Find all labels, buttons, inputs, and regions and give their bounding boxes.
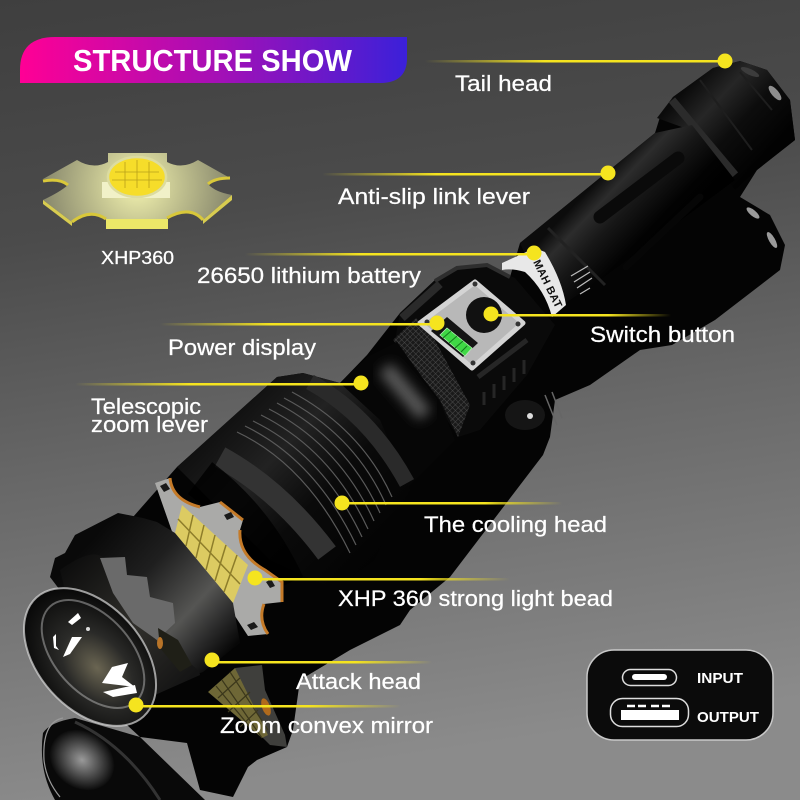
leader: attack head [204,652,432,668]
label: battery: 26650 lithium battery [197,263,421,288]
leader: switch [484,306,671,322]
switch panel [420,282,523,368]
XHP360 LED star [43,153,232,229]
leader: cooling head [334,496,562,510]
anti-slip link lever [520,125,735,312]
LED board [155,478,282,636]
battery ring [502,248,566,317]
switch section [395,265,555,437]
small reflected board [157,628,192,672]
chip [102,182,170,198]
label: attack head: Attack head [296,669,421,694]
leader: telescopic [75,376,368,390]
input port icon [622,670,676,686]
label: telescopic zoom lever: Telescopic [91,394,201,419]
reflection of lens [38,718,205,800]
grip slots [478,340,527,405]
reflection of LED board [208,665,287,747]
switch button [466,297,502,333]
label: anti-slip: Anti-slip link lever [338,184,530,209]
neck bars [571,266,592,294]
output label: OUTPUT [697,709,759,726]
leader: battery [245,246,542,260]
knurled ring [393,318,470,437]
label: power display: Power display [168,335,316,360]
battery ring: MAH BAT [530,258,564,310]
sleeve [340,342,455,490]
label: switch: Switch button [590,322,735,347]
zoom convex mirror [0,563,182,751]
attack head [50,513,240,695]
ports panel [587,650,773,740]
label: light bead: XHP 360 strong light bead [338,586,613,611]
label: telescopic zoom lever [91,394,208,437]
front ring [60,554,200,695]
leader: power display [160,316,444,330]
cooling ribs [237,392,392,553]
leader: zoom mirror [128,698,401,712]
cooling head [177,373,410,590]
title banner [20,37,407,83]
input label: INPUT [697,670,743,687]
label: telescopic zoom lever: zoom lever [91,412,208,437]
label: cooling head: The cooling head [424,512,607,537]
title banner: STRUCTURE SHOW [73,43,353,78]
leader: tail head [425,54,732,68]
XHP360 label: XHP360 [101,248,174,268]
reflected knob [505,392,562,430]
output port icon [610,698,688,726]
label: tail head: Tail head [455,71,552,96]
label: zoom mirror: Zoom convex mirror [220,713,433,738]
reflected tail slots [745,206,779,249]
leader: anti-slip [322,166,616,180]
leader: light bead [248,570,510,586]
head opening [100,557,175,640]
power display [431,317,478,357]
tail head [657,61,795,190]
